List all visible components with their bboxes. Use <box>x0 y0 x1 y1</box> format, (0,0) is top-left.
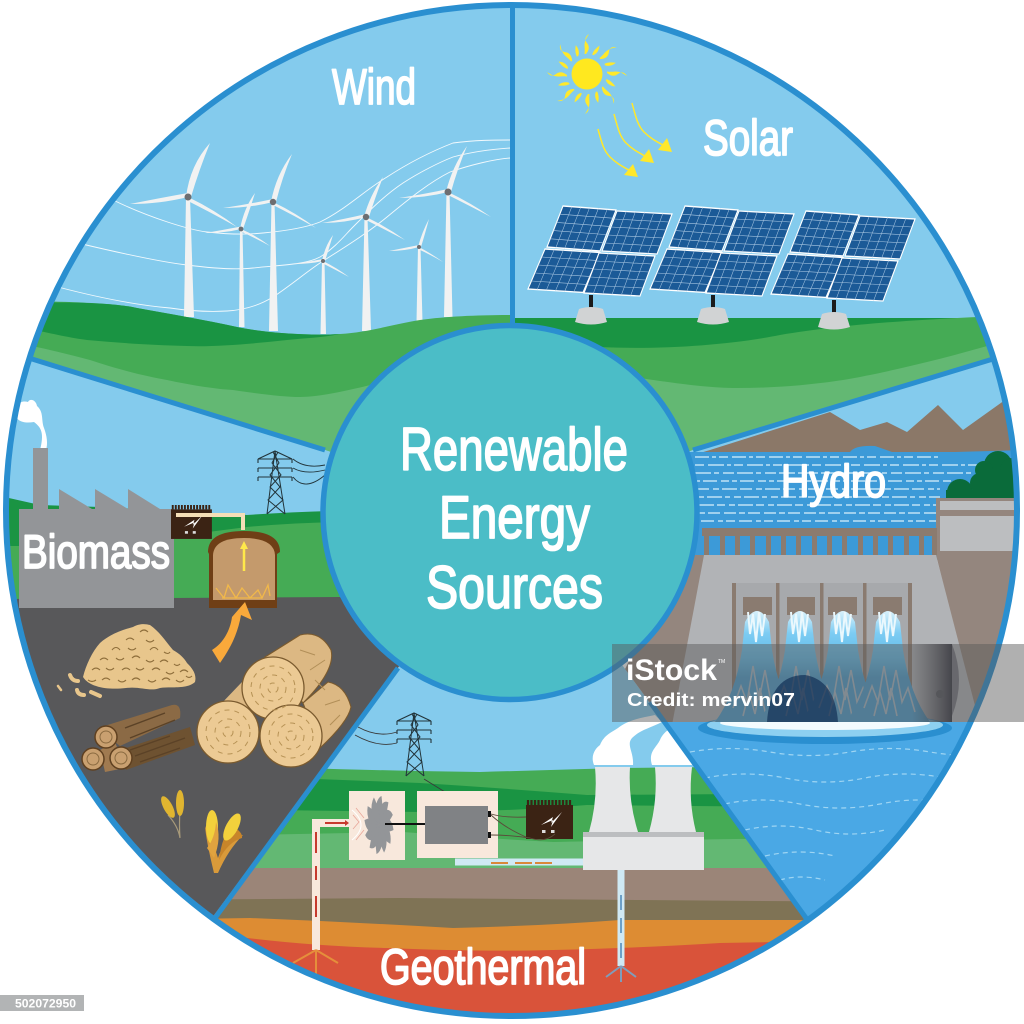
geothermal wires <box>355 727 445 792</box>
biomass inverter <box>171 505 212 539</box>
title: Sources <box>426 554 603 621</box>
solar hills <box>515 317 990 452</box>
wind sky <box>54 8 510 334</box>
icon: sun <box>547 34 627 114</box>
cooling tower right <box>649 767 696 832</box>
hydro label: Hydro <box>781 455 886 507</box>
wind hills <box>33 302 510 452</box>
dam face <box>672 555 980 725</box>
icon: wheat <box>161 790 184 838</box>
panel: hydro <box>615 340 1024 1024</box>
panel: solar <box>515 8 990 452</box>
watermark band: TM <box>718 659 725 665</box>
orange arrow <box>212 602 252 663</box>
wind turbine 5 <box>322 177 405 331</box>
wind air currents <box>58 140 510 311</box>
panel: biomass <box>9 362 399 916</box>
waterfall 2 <box>758 611 842 722</box>
logs <box>82 705 195 772</box>
cooling tower left <box>589 767 638 832</box>
biomass ground <box>16 597 399 916</box>
dam tower <box>936 498 1024 555</box>
biomass hills <box>9 498 340 599</box>
mountains <box>690 390 1024 456</box>
generator box <box>417 791 498 858</box>
turbine shaft <box>385 823 425 825</box>
solar panel array 1 <box>528 206 672 324</box>
reservoir <box>690 446 1024 560</box>
panel: geothermal <box>130 650 900 1024</box>
geothermal inverter <box>526 800 573 839</box>
dam left abutment <box>615 555 704 730</box>
geothermal sky <box>130 650 890 810</box>
wind turbine 6 <box>389 219 443 322</box>
title <box>400 416 628 621</box>
stock id tag: 502072950 <box>15 998 76 1010</box>
furnace <box>208 531 280 608</box>
title: Renewable <box>400 416 628 483</box>
spillway gates <box>732 583 912 723</box>
solar panel array 2 <box>650 206 794 324</box>
hay bales <box>197 634 351 767</box>
biomass label: Biomass <box>22 525 170 578</box>
geothermal hills <box>220 765 900 880</box>
wind turbine 2 <box>205 193 270 327</box>
geothermal rock layers <box>130 868 900 1024</box>
solar label: Solar <box>703 110 793 166</box>
hot water pipe <box>293 820 349 975</box>
watermark band: Credit: mervin07 <box>627 690 795 710</box>
title: Energy <box>439 484 590 551</box>
waterfall pool <box>698 712 952 744</box>
wind turbine 4 <box>293 235 349 334</box>
wind label: Wind <box>332 59 416 115</box>
solar sky <box>515 8 976 318</box>
hydro sky <box>650 340 1024 460</box>
lower river <box>650 722 1024 1024</box>
pellet pile <box>58 624 195 696</box>
wind turbine 1 <box>130 143 237 317</box>
cold water pipe <box>455 862 636 982</box>
solar panel array 3 <box>771 211 915 330</box>
geothermal pylon <box>397 713 431 776</box>
smoke <box>593 715 700 765</box>
dam railing <box>702 528 937 555</box>
dam right abutment <box>936 515 1024 735</box>
biomass pylon <box>258 451 292 514</box>
biomass wires <box>293 459 325 484</box>
waterfall 3 <box>801 611 885 722</box>
heat pipe <box>176 515 243 530</box>
stock id tag <box>0 995 84 1011</box>
wind turbine 7 <box>399 146 491 317</box>
wind turbine 3 <box>223 154 316 331</box>
generator wires <box>491 814 555 840</box>
turbine box <box>349 791 405 860</box>
icon: corn <box>205 810 244 873</box>
geothermal label: Geothermal <box>380 939 586 995</box>
panel: wind <box>33 8 510 452</box>
sun ray arrows <box>598 103 672 177</box>
waterfall 4 <box>846 611 930 722</box>
watermark band: iStock <box>626 654 717 687</box>
watermark band <box>612 644 1024 722</box>
power plant base <box>583 832 704 870</box>
factory <box>19 448 174 608</box>
centre circle <box>323 326 697 700</box>
trees <box>946 451 1024 505</box>
waterfall 1 <box>715 611 799 722</box>
factory smoke <box>16 400 47 450</box>
biomass sky <box>9 362 340 598</box>
